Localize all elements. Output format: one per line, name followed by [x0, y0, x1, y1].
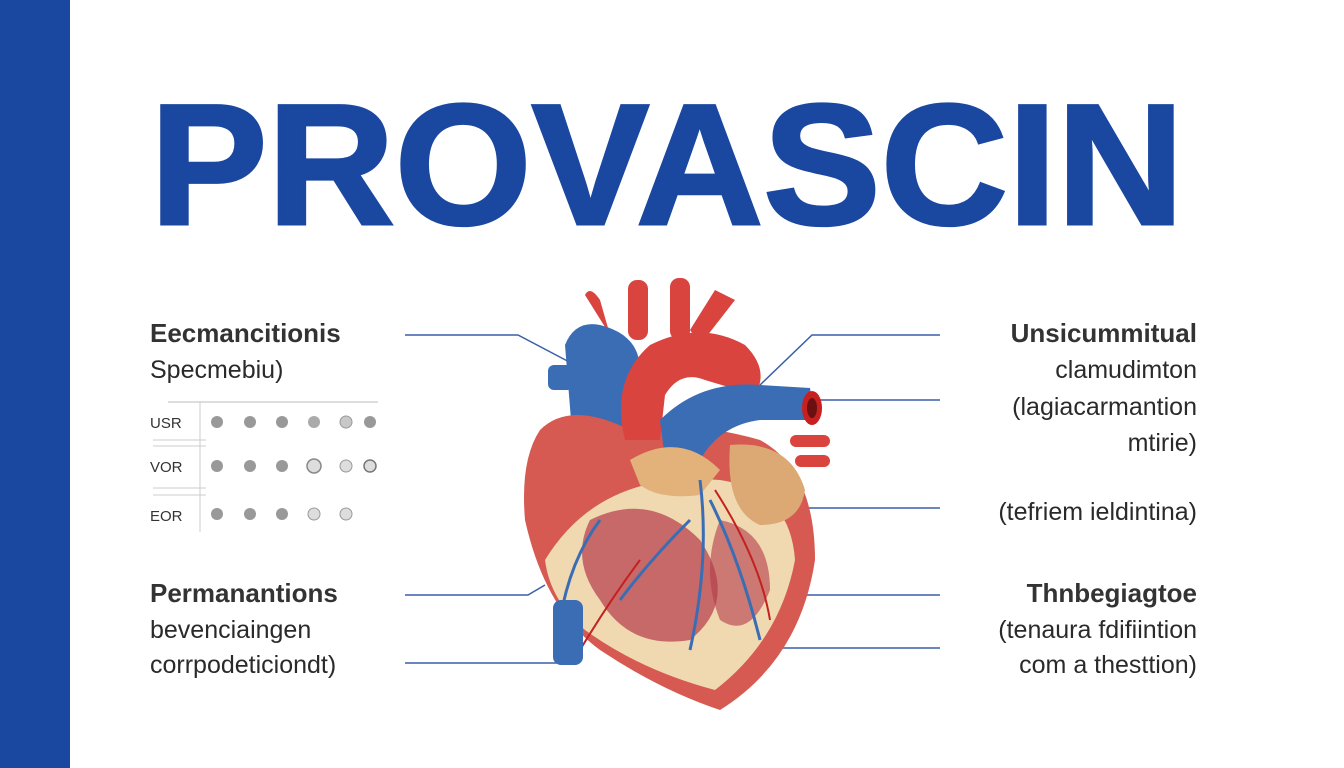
- text: Specmebiu): [150, 356, 283, 384]
- left block 2: Permanantions: [150, 578, 338, 608]
- text: (tenaura fdifiintion: [998, 616, 1197, 644]
- right block 2: (tefriem ieldintina): [998, 498, 1197, 526]
- text: corrpodeticiondt): [150, 651, 336, 679]
- text: mtirie): [1128, 429, 1197, 457]
- text: com a thesttion): [1019, 651, 1197, 679]
- title: PROVASCIN: [150, 69, 1184, 261]
- dot table: [150, 402, 378, 532]
- text: clamudimton: [1055, 356, 1197, 384]
- right block 3: Thnbegiagtoe: [1027, 578, 1197, 608]
- left block 1: Eecmancitionis: [150, 318, 341, 348]
- text: (lagiacarmantion: [1012, 393, 1197, 421]
- left blue bar: [0, 0, 70, 768]
- dot table: USR: [150, 415, 182, 432]
- text: bevenciaingen: [150, 616, 311, 644]
- dot table: EOR: [150, 508, 183, 525]
- dot table: VOR: [150, 459, 183, 476]
- right block 1: Unsicummitual: [1011, 318, 1197, 348]
